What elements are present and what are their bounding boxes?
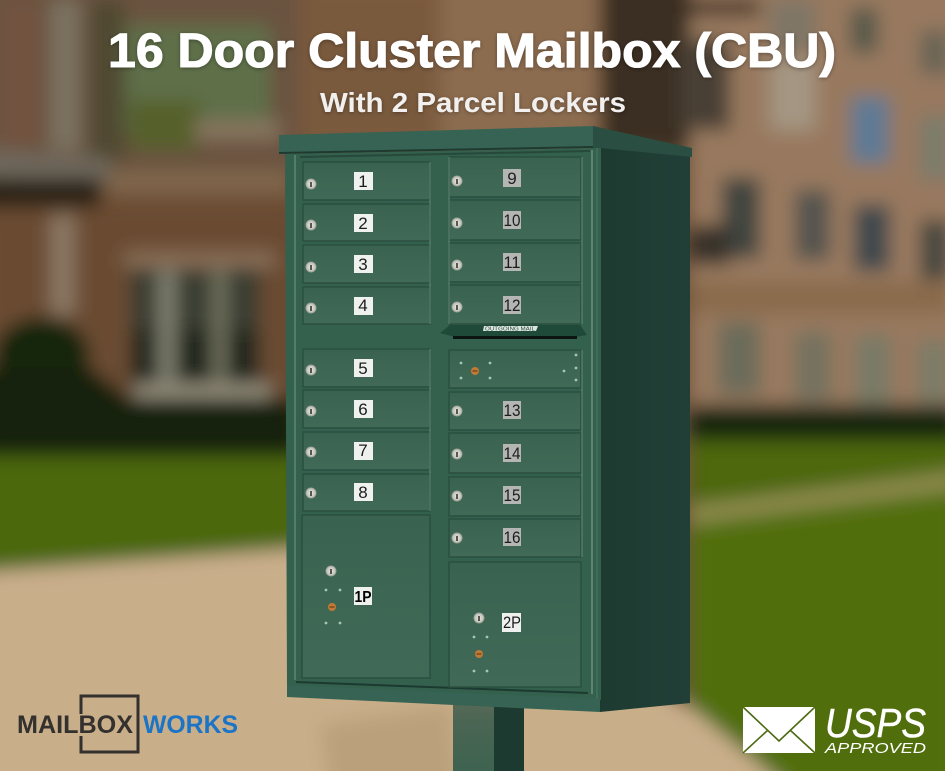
hedge: [0, 317, 90, 393]
left door number plates: 6: [358, 400, 368, 419]
right door number plates: 15: [504, 486, 520, 505]
left door number plates: 1P: [354, 589, 372, 606]
roof: [279, 126, 692, 157]
left door number plates: 4: [358, 296, 368, 315]
right door number plates: 13: [504, 401, 520, 420]
left door number plates: 3: [358, 255, 368, 274]
Mailbox Works logo: MAILBOX: [17, 711, 133, 739]
outgoing mail slot: OUTGOING MAIL: [485, 326, 535, 332]
right door number plates: 11: [504, 253, 520, 272]
side panel: [593, 140, 690, 712]
outgoing mail slot: [440, 325, 587, 339]
right door number plates: [502, 169, 521, 632]
rivets and cam locks: [325, 354, 577, 672]
USPS Approved badge: [743, 700, 926, 757]
left door number plates: 8: [358, 483, 368, 502]
light door edges: [430, 157, 582, 557]
walkway: [0, 548, 790, 771]
left brick wall: [0, 0, 320, 170]
cluster mailbox unit: [279, 126, 692, 712]
lawn path: [690, 470, 945, 525]
Mailbox Works logo: [17, 696, 238, 752]
left door number plates: [354, 172, 373, 606]
Mailbox Works logo: WORKS: [143, 711, 238, 739]
bottom lip: [287, 685, 600, 712]
center building: [300, 0, 440, 150]
left door number plates: 2: [358, 214, 368, 233]
icon: envelope: [743, 707, 815, 753]
right door number plates: 12: [504, 296, 520, 315]
USPS Approved badge: APPROVED: [824, 740, 926, 757]
right column doors: [449, 157, 581, 687]
right door number plates: 9: [507, 169, 517, 188]
door locks: [306, 176, 484, 624]
left door number plates: 5: [358, 359, 368, 378]
right door number plates: 2P: [503, 613, 521, 632]
left column doors: [302, 162, 430, 678]
USPS Approved badge: USPS: [825, 700, 926, 746]
right building: [690, 0, 945, 420]
ground floor window: [125, 252, 275, 268]
subtitle: With 2 Parcel Lockers: [320, 87, 626, 118]
right door number plates: 10: [504, 211, 520, 230]
front frame: [285, 148, 601, 700]
lawn: [0, 456, 300, 574]
right door number plates: 14: [504, 444, 520, 463]
title: 16 Door Cluster Mailbox (CBU): [108, 25, 836, 78]
right door number plates: 16: [504, 528, 520, 547]
left door number plates: 1: [358, 172, 368, 191]
mailbox post: [453, 700, 524, 771]
left door number plates: 7: [358, 441, 368, 460]
